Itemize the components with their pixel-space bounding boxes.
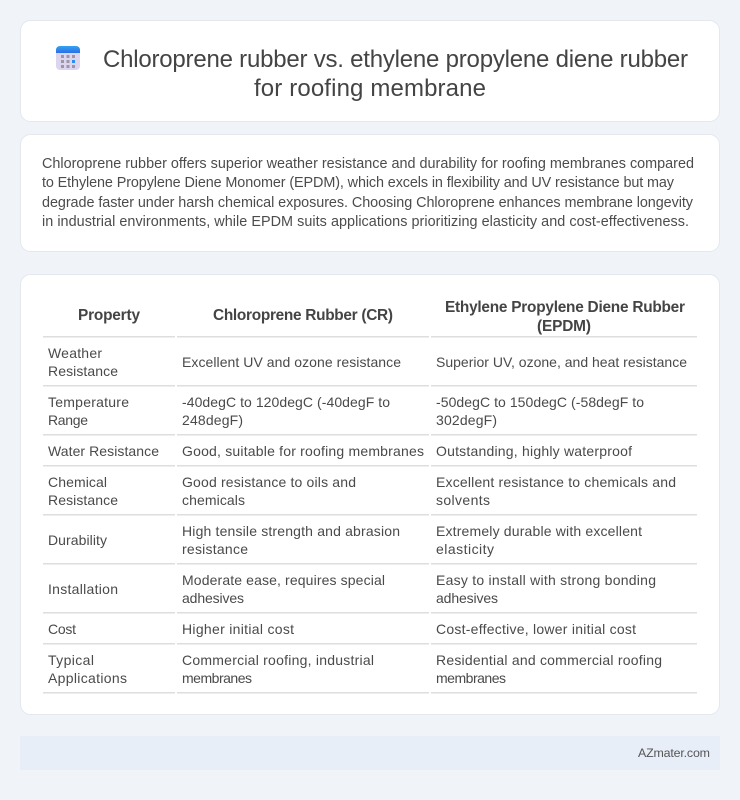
text block: summary paragraph: Chloroprene rubber offers superior weather resistance and durability for roofing membranes compared (42, 156, 694, 172)
row: temperature range: Temperature (48, 394, 129, 410)
title: for roofing membrane (254, 75, 486, 102)
panel: comparison table (20, 274, 720, 714)
row: durability: High tensile strength and abrasion (182, 523, 400, 539)
row: temperature range (48, 394, 644, 428)
row: cost: Cost (48, 621, 76, 637)
row: chemical resistance: Chemical (48, 474, 107, 490)
title: Chloroprene rubber vs. ethylene propylene diene rubber (103, 46, 688, 73)
row: temperature range: 248degF) (182, 412, 243, 428)
row: typical applications: Residential and commercial roofing (436, 652, 662, 668)
row: typical applications (48, 652, 662, 686)
footer band (20, 736, 720, 770)
row: chemical resistance (48, 474, 676, 508)
row: cost: Cost-effective, lower initial cost (436, 621, 636, 637)
row: chemical resistance: Resistance (48, 492, 118, 508)
row: durability: Durability (48, 532, 107, 548)
footer credit: AZmater.com (638, 746, 710, 760)
row: installation: Installation (48, 581, 118, 597)
row: water resistance: Good, suitable for roofing membranes (182, 443, 424, 459)
title (103, 46, 688, 102)
table header row: (EPDM) (537, 318, 591, 335)
row: installation: adhesives (436, 590, 498, 606)
table header row: Property (78, 307, 140, 324)
row: typical applications: Typical (48, 652, 94, 668)
row: installation: Easy to install with strong bonding (436, 572, 656, 588)
row: durability: resistance (182, 541, 248, 557)
row: typical applications: Commercial roofing, industrial (182, 652, 374, 668)
row: weather resistance: Superior UV, ozone, and heat resistance (436, 354, 687, 370)
row: chemical resistance: Excellent resistance to chemicals and (436, 474, 676, 490)
row: chemical resistance: Good resistance to oils and (182, 474, 356, 490)
table header row: Ethylene Propylene Diene Rubber (445, 299, 685, 316)
row: installation: adhesives (182, 590, 244, 606)
row: chemical resistance: chemicals (182, 492, 245, 508)
row: durability (48, 523, 642, 557)
row: weather resistance (48, 345, 687, 379)
row: typical applications: membranes (182, 670, 252, 686)
row: water resistance: Water Resistance (48, 443, 159, 459)
row: water resistance (48, 443, 632, 459)
row: weather resistance: Excellent UV and ozone resistance (182, 354, 401, 370)
text block: summary paragraph (42, 156, 694, 230)
row: temperature range: -40degC to 120degC (-40degF to (182, 394, 390, 410)
text block: summary paragraph: to Ethylene Propylene Diene Monomer (EPDM), which excels in flexibility and UV resistance but may (42, 175, 675, 191)
row: durability: elasticity (436, 541, 494, 557)
panel: summary (20, 134, 720, 252)
row: installation: Moderate ease, requires special (182, 572, 385, 588)
icon: calendar (56, 46, 80, 70)
row: typical applications: membranes (436, 670, 506, 686)
row: cost: Higher initial cost (182, 621, 294, 637)
table header row (78, 299, 685, 335)
row: water resistance: Outstanding, highly waterproof (436, 443, 632, 459)
row: weather resistance: Resistance (48, 363, 118, 379)
row: temperature range: Range (48, 412, 88, 428)
row: chemical resistance: solvents (436, 492, 490, 508)
row: temperature range: -50degC to 150degC (-58degF to (436, 394, 644, 410)
text block: summary paragraph: degrade faster under harsh chemical exposures. Choosing Chloroprene enhances membrane longevity (42, 195, 694, 211)
panel: title header (20, 20, 720, 122)
row: typical applications: Applications (48, 670, 127, 686)
row: cost (48, 621, 636, 637)
row: weather resistance: Weather (48, 345, 102, 361)
row: temperature range: 302degF) (436, 412, 497, 428)
table header row: Chloroprene Rubber (CR) (213, 307, 393, 324)
row: durability: Extremely durable with excellent (436, 523, 642, 539)
text block: summary paragraph: in industrial environments, while EPDM suits applications prioritizing elasticity and cost-effectiveness. (42, 214, 689, 230)
row: installation (48, 572, 656, 606)
